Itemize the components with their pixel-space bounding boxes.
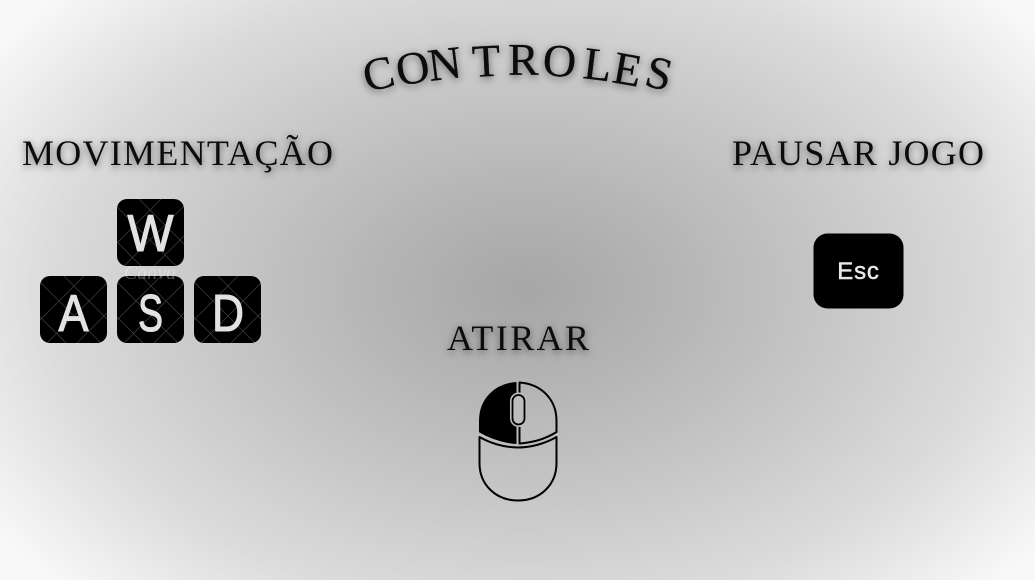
heading: atirar: ATIRAR xyxy=(447,318,589,358)
esc key xyxy=(814,234,904,308)
key W xyxy=(117,199,184,266)
key S: S xyxy=(138,285,163,343)
watermark: Canva xyxy=(124,262,176,284)
key D: D xyxy=(212,285,244,343)
key A xyxy=(40,276,107,343)
right button xyxy=(520,382,556,444)
mouse icon xyxy=(480,382,556,500)
esc key: Esc xyxy=(837,258,880,285)
heading: movimentação: MOVIMENTAÇÃO xyxy=(22,133,333,173)
key S xyxy=(117,276,184,343)
key W: W xyxy=(128,205,174,263)
scroll wheel xyxy=(510,392,527,427)
key D xyxy=(194,276,261,343)
mouse body xyxy=(480,437,556,500)
WASD keys xyxy=(40,199,261,343)
left button xyxy=(480,382,516,444)
heading: pausar jogo: PAUSAR JOGO xyxy=(732,133,984,173)
title: CONTROLES xyxy=(358,34,678,102)
key A: A xyxy=(58,285,89,343)
